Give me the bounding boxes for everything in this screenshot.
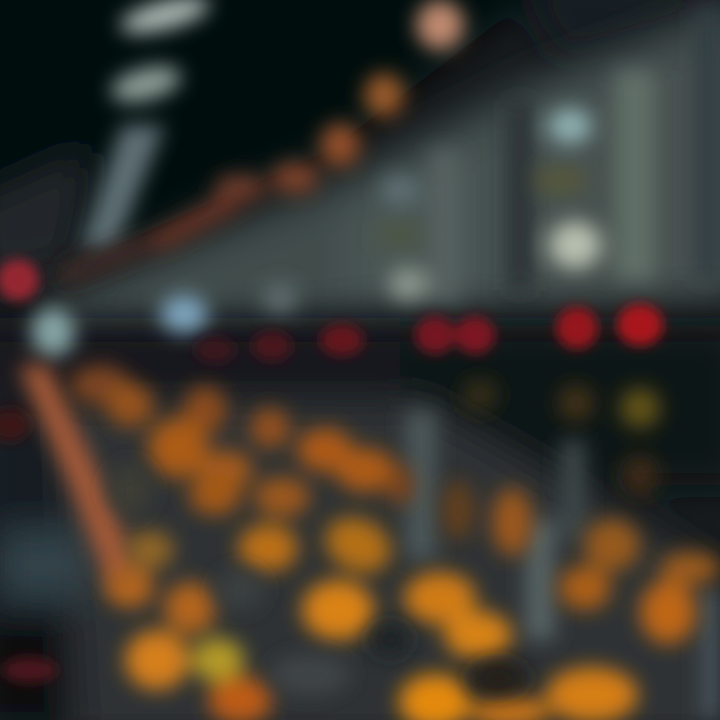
background: ceiling xyxy=(0,0,720,290)
red indicator lights xyxy=(0,259,663,683)
vertical posts xyxy=(405,410,720,720)
ceiling lights xyxy=(80,0,213,250)
wall details xyxy=(262,10,720,313)
orange buttons xyxy=(70,365,720,720)
orange light chain xyxy=(60,0,464,288)
blue indicator lights xyxy=(31,295,208,357)
dark gaps between buttons xyxy=(108,464,528,696)
background: dark lower band xyxy=(0,330,720,720)
background: equipment wall xyxy=(50,0,720,325)
amber indicator lights xyxy=(462,379,660,495)
orange streak xyxy=(18,365,140,590)
